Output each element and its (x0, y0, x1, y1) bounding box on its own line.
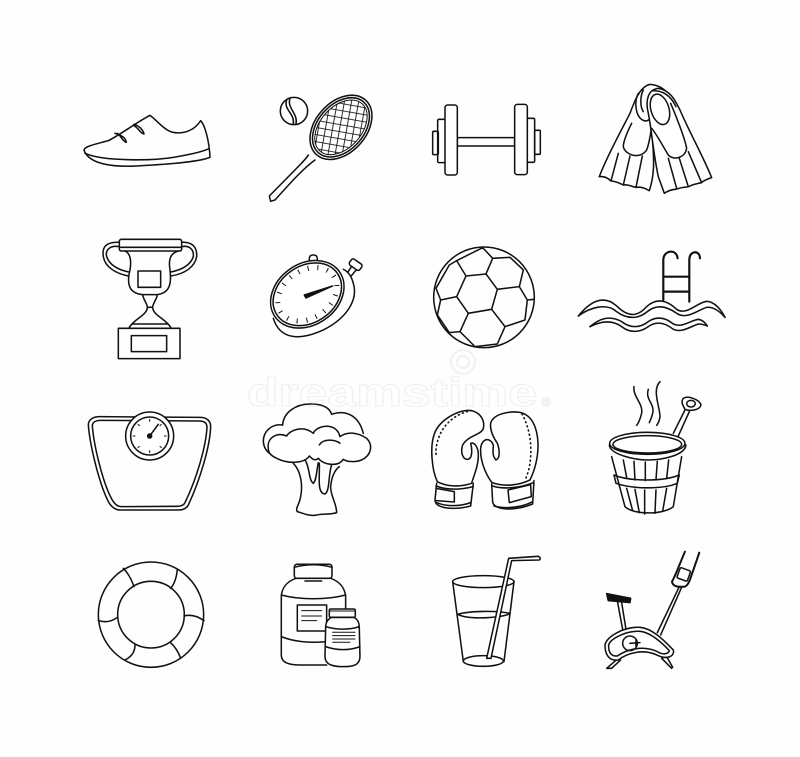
icon: swim fins (599, 84, 712, 193)
icon: supplement jars (281, 564, 360, 667)
icon: stopwatch (258, 247, 363, 342)
icon: bathroom scale (88, 412, 211, 510)
icon: glass with straw (453, 556, 540, 666)
watermark: dreamstime (247, 371, 537, 415)
watermark (247, 350, 551, 415)
icon: running shoe (84, 115, 210, 166)
icon: sauna bucket with ladle and steam (609, 382, 701, 514)
icon: broccoli (263, 404, 371, 515)
icon: life ring (98, 562, 204, 667)
icon: boxing gloves (432, 410, 538, 509)
icon: tennis racket and ball (269, 83, 384, 201)
icon: soccer ball (434, 247, 534, 348)
icon: dumbbell (433, 104, 540, 175)
icon: trophy (103, 239, 197, 359)
icon: exercise bike (605, 552, 699, 668)
icon: swimming pool ladder and waves (578, 252, 725, 331)
